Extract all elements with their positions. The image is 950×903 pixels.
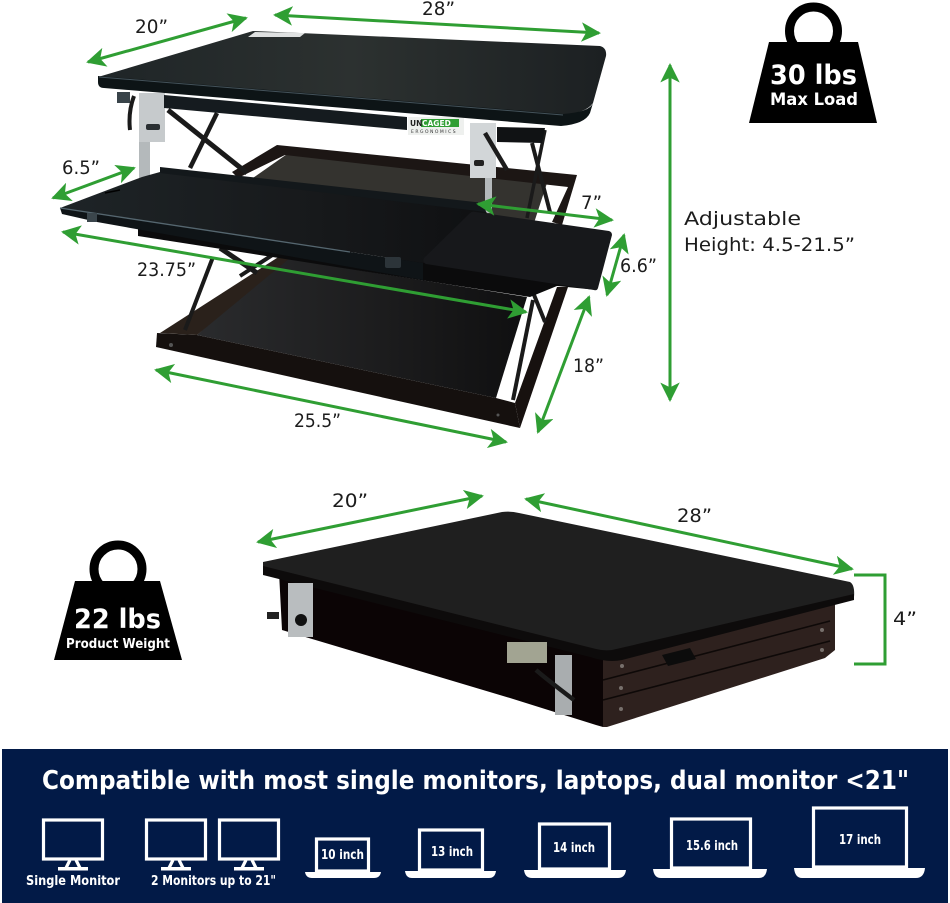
arrow adjustable height: [668, 65, 672, 400]
weight badge: 30 lbs max load: 30 lbs: [770, 60, 857, 91]
dimension labels: raised desk: [62, 0, 657, 432]
brand label: [408, 117, 464, 135]
label 25.5 in: 25.5”: [294, 410, 341, 432]
icon: 17 inch laptop: [794, 808, 925, 878]
icon: left dual monitor: [146, 820, 206, 870]
icon: 15.6 inch laptop: 15.6 inch: [686, 839, 738, 854]
label 20 in: 20”: [332, 490, 368, 512]
icon: 15.6 inch laptop: [653, 819, 767, 878]
product photo: folded desk: [263, 512, 854, 727]
label adjustable height: Height: 4.5-21.5”: [684, 234, 855, 256]
label 18 in: 18”: [573, 355, 604, 377]
arrow 23.75 in: [63, 232, 526, 312]
product photo: raised desk: [60, 31, 612, 428]
icon: single monitor: [44, 820, 102, 870]
icon: 17 inch laptop: 17 inch: [839, 833, 881, 848]
label 6.5 in: 6.5”: [62, 157, 100, 179]
keyboard tray: [60, 167, 487, 280]
label adjustable height: Adjustable: [684, 208, 801, 230]
lower scissor legs: [185, 248, 545, 400]
base frame and shelf: [156, 256, 568, 428]
weight badge: 22 lbs product weight: Product Weight: [66, 637, 170, 652]
arrow 20 in: [88, 18, 246, 62]
panel: compatibility: [2, 749, 948, 903]
right bracket: [555, 655, 572, 715]
dimension marks: folded desk: [258, 490, 917, 664]
desktop surface: [98, 31, 606, 126]
icon: 13 inch laptop: [405, 830, 496, 878]
icon: 14 inch laptop: [524, 824, 626, 878]
seams: [603, 621, 830, 700]
label 20 in: 20”: [135, 16, 168, 38]
brown side: [603, 598, 835, 727]
left bracket: [288, 583, 313, 637]
under-desk beam: [164, 95, 407, 130]
rear frame and shelf: [232, 145, 577, 226]
icon: 13 inch laptop: 13 inch: [431, 845, 473, 860]
icon: 14 inch laptop: 14 inch: [553, 841, 595, 856]
label 23.75 in: 23.75”: [137, 259, 196, 281]
caption: single monitor: Single Monitor: [26, 874, 121, 889]
weight badge: 22 lbs product weight: [54, 545, 182, 660]
arrow 7 in: [478, 204, 612, 220]
desktop top: [263, 512, 854, 653]
mouse pad platform: [423, 212, 612, 290]
under-tray shadow: [138, 228, 597, 297]
arrow 28 in: [526, 499, 852, 569]
arrow 6.5 in: [53, 168, 134, 198]
label 7 in: 7”: [581, 192, 602, 214]
arrow 6.6 in: [607, 235, 624, 295]
label 4 in: 4”: [893, 608, 917, 630]
brand label: ERGONOMICS: [411, 129, 457, 135]
label adjustable height: [684, 208, 855, 256]
label 28 in: 28”: [677, 505, 712, 527]
arrow 18 in: [538, 297, 589, 432]
dark side: [279, 572, 612, 727]
screws: [619, 628, 824, 711]
brand label: UN: [410, 119, 422, 128]
tray latch: [385, 257, 401, 268]
bracket 4 in: [854, 575, 885, 664]
icon: 10 inch laptop: [305, 839, 381, 878]
arrow 25.5 in: [156, 370, 506, 442]
weight badge: 30 lbs max load: [749, 7, 877, 123]
icon: 10 inch laptop: 10 inch: [321, 848, 364, 863]
label 6.6 in: 6.6”: [620, 255, 657, 277]
arrow 28 in: [275, 15, 599, 33]
right height bracket: [470, 123, 507, 213]
arrow 20 in: [258, 496, 482, 542]
dimension arrows: raised desk: [53, 15, 670, 442]
left height bracket: [117, 92, 165, 178]
weight badge: 22 lbs product weight: 22 lbs: [74, 604, 161, 635]
upper scissor legs: [168, 110, 550, 218]
icon: right dual monitor: [220, 820, 278, 870]
handle: [662, 648, 696, 666]
weight badge: 30 lbs max load: Max Load: [770, 90, 858, 110]
caption: dual monitors: 2 Monitors up to 21": [151, 874, 276, 889]
brand label: CAGED: [422, 119, 451, 128]
label: [507, 642, 547, 663]
